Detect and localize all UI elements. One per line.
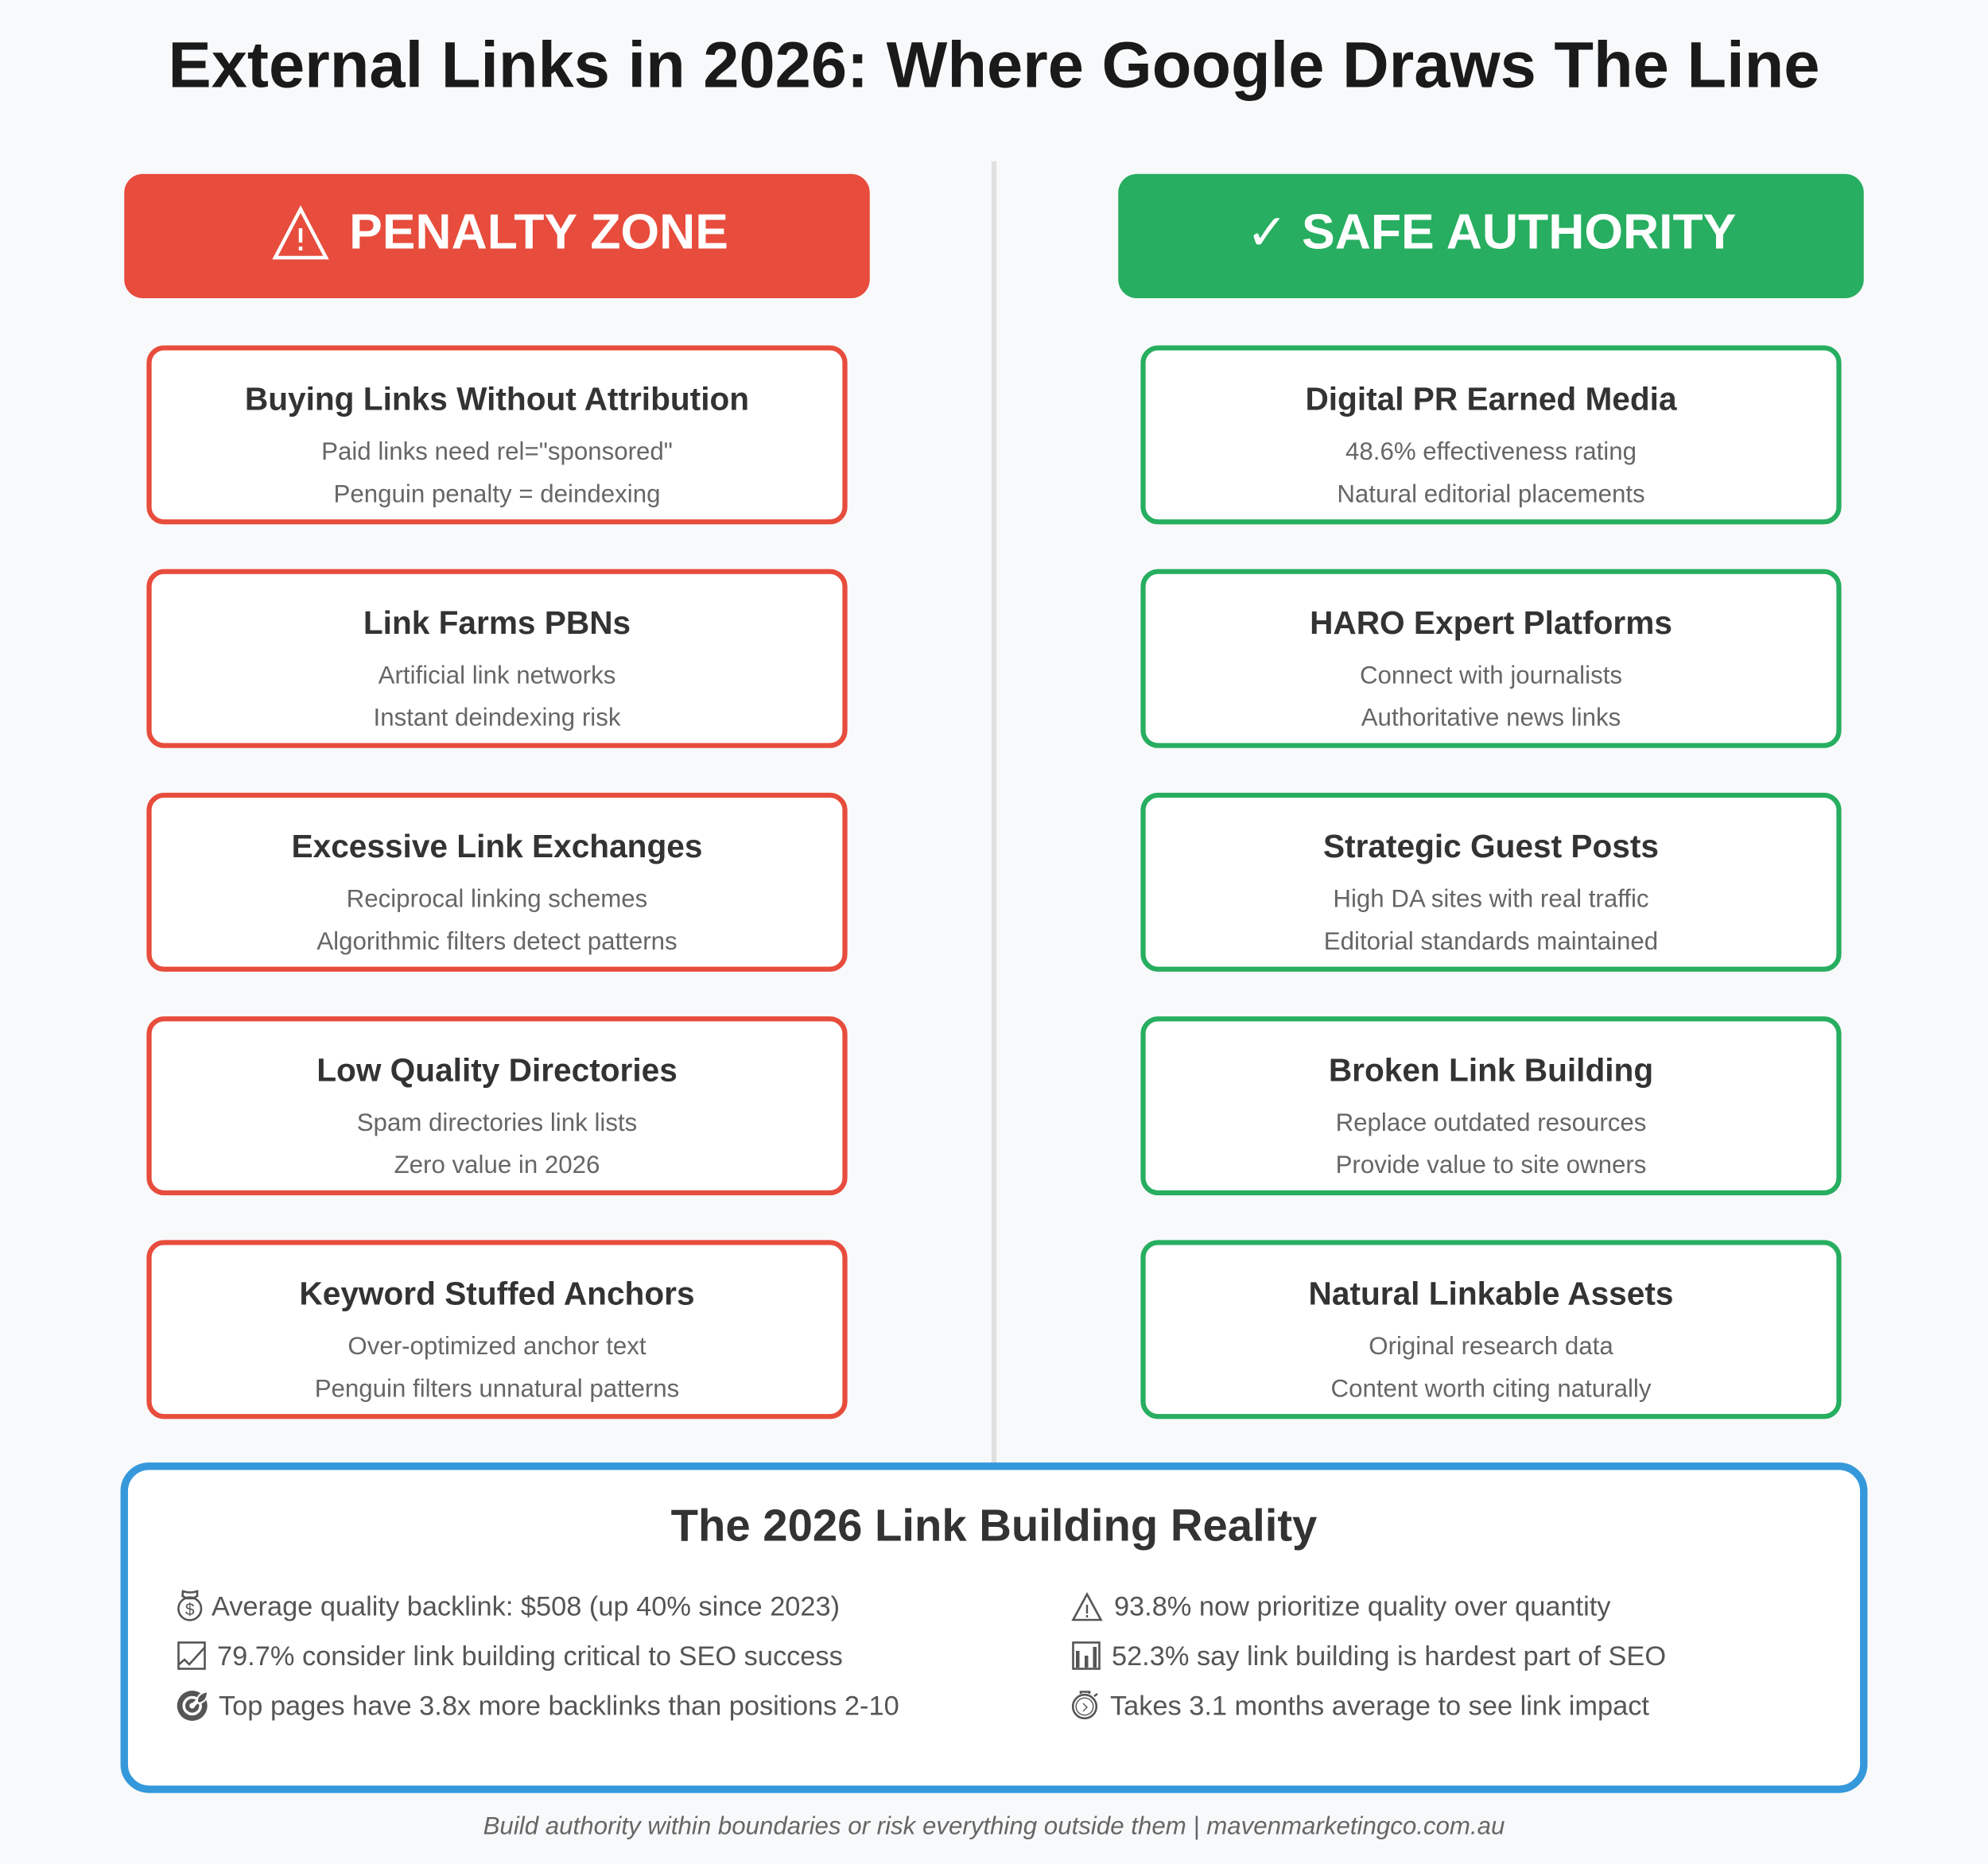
card: link exchanges: Excessive Link Exchanges <box>292 828 702 864</box>
stat: time to impact: Takes 3.1 months average to see link impact <box>1110 1691 1649 1721</box>
title: External Links in 2026: Where Google Draws The Line <box>169 29 1819 101</box>
icon: bar chart <box>1074 1643 1100 1668</box>
stat: quality over quantity: 93.8% now prioritize quality over quantity <box>1114 1591 1611 1621</box>
icon: target <box>177 1691 208 1721</box>
card: digital pr <box>1143 348 1839 522</box>
card: haro: Authoritative news links <box>1361 704 1621 732</box>
panel: safe authority header: SAFE AUTHORITY <box>1302 204 1736 259</box>
panel: link building reality <box>124 1466 1864 1789</box>
card: keyword stuffed anchors <box>149 1242 845 1416</box>
icon: warning triangle <box>275 209 326 258</box>
card: guest posts: High DA sites with real traffic <box>1333 885 1649 913</box>
card: link farms: Link Farms PBNs <box>363 604 631 641</box>
card: haro <box>1143 572 1839 746</box>
card: low quality directories: Spam directories link lists <box>357 1109 637 1136</box>
card: link farms: Artificial link networks <box>379 661 615 689</box>
card: link farms <box>149 572 845 746</box>
icon: money bag <box>178 1591 201 1620</box>
stat: top pages backlinks: Top pages have 3.8x more backlinks than positions 2-10 <box>219 1691 899 1721</box>
card: low quality directories: Low Quality Directories <box>316 1051 678 1088</box>
card: buying links: Paid links need rel="sponsored" <box>321 437 673 465</box>
card: link exchanges <box>149 795 845 969</box>
card: digital pr: Digital PR Earned Media <box>1305 381 1677 417</box>
icon: warning triangle small <box>1074 1594 1101 1620</box>
stat: link building critical: 79.7% consider link building critical to SEO success <box>217 1641 843 1672</box>
card: keyword stuffed anchors: Penguin filters unnatural patterns <box>315 1374 679 1402</box>
card: buying links: Penguin penalty = deindexing <box>334 480 660 507</box>
card: buying links <box>149 348 845 522</box>
card: digital pr: Natural editorial placements <box>1337 480 1645 507</box>
card: broken link building <box>1143 1019 1839 1193</box>
card: link exchanges: Algorithmic filters detect patterns <box>316 927 678 955</box>
icon: line chart <box>179 1643 205 1668</box>
card: broken link building: Provide value to site owners <box>1336 1151 1646 1179</box>
icon: money bag: $ <box>185 1601 195 1619</box>
stat: hardest part of SEO: 52.3% say link building is hardest part of SEO <box>1112 1641 1666 1672</box>
card: guest posts: Strategic Guest Posts <box>1323 828 1659 864</box>
panel: penalty zone header <box>124 174 870 298</box>
card: link farms: Instant deindexing risk <box>374 704 621 732</box>
panel: safe authority header: ✓ <box>1246 203 1288 261</box>
card: broken link building: Replace outdated resources <box>1336 1109 1646 1136</box>
card: link exchanges: Reciprocal linking schemes <box>347 885 647 913</box>
card: keyword stuffed anchors: Keyword Stuffed Anchors <box>299 1276 695 1312</box>
card: low quality directories <box>149 1019 845 1193</box>
stat: average backlink cost: Average quality backlink: $508 (up 40% since 2023) <box>212 1591 840 1621</box>
card: broken link building: Broken Link Building <box>1329 1051 1653 1088</box>
card: buying links: Buying Links Without Attribution <box>245 381 749 417</box>
card: low quality directories: Zero value in 2026 <box>394 1151 600 1179</box>
footer note: Build authority within boundaries or risk everything outside them | mavenmarketingco.com.au <box>483 1812 1505 1839</box>
icon: stopwatch <box>1073 1692 1097 1718</box>
panel heading: The 2026 Link Building Reality <box>671 1500 1317 1550</box>
panel: safe authority header <box>1118 174 1864 298</box>
card: linkable assets: Content worth citing naturally <box>1330 1374 1652 1402</box>
card: haro: HARO Expert Platforms <box>1310 604 1672 641</box>
card: haro: Connect with journalists <box>1360 661 1622 689</box>
card: linkable assets: Natural Linkable Assets <box>1309 1276 1673 1312</box>
card: linkable assets <box>1143 1242 1839 1416</box>
card: keyword stuffed anchors: Over-optimized anchor text <box>348 1332 646 1360</box>
card: guest posts <box>1143 795 1839 969</box>
card: linkable assets: Original research data <box>1369 1332 1613 1360</box>
card: digital pr: 48.6% effectiveness rating <box>1345 437 1637 465</box>
card: guest posts: Editorial standards maintained <box>1324 927 1658 955</box>
panel: penalty zone header: PENALTY ZONE <box>349 204 728 259</box>
